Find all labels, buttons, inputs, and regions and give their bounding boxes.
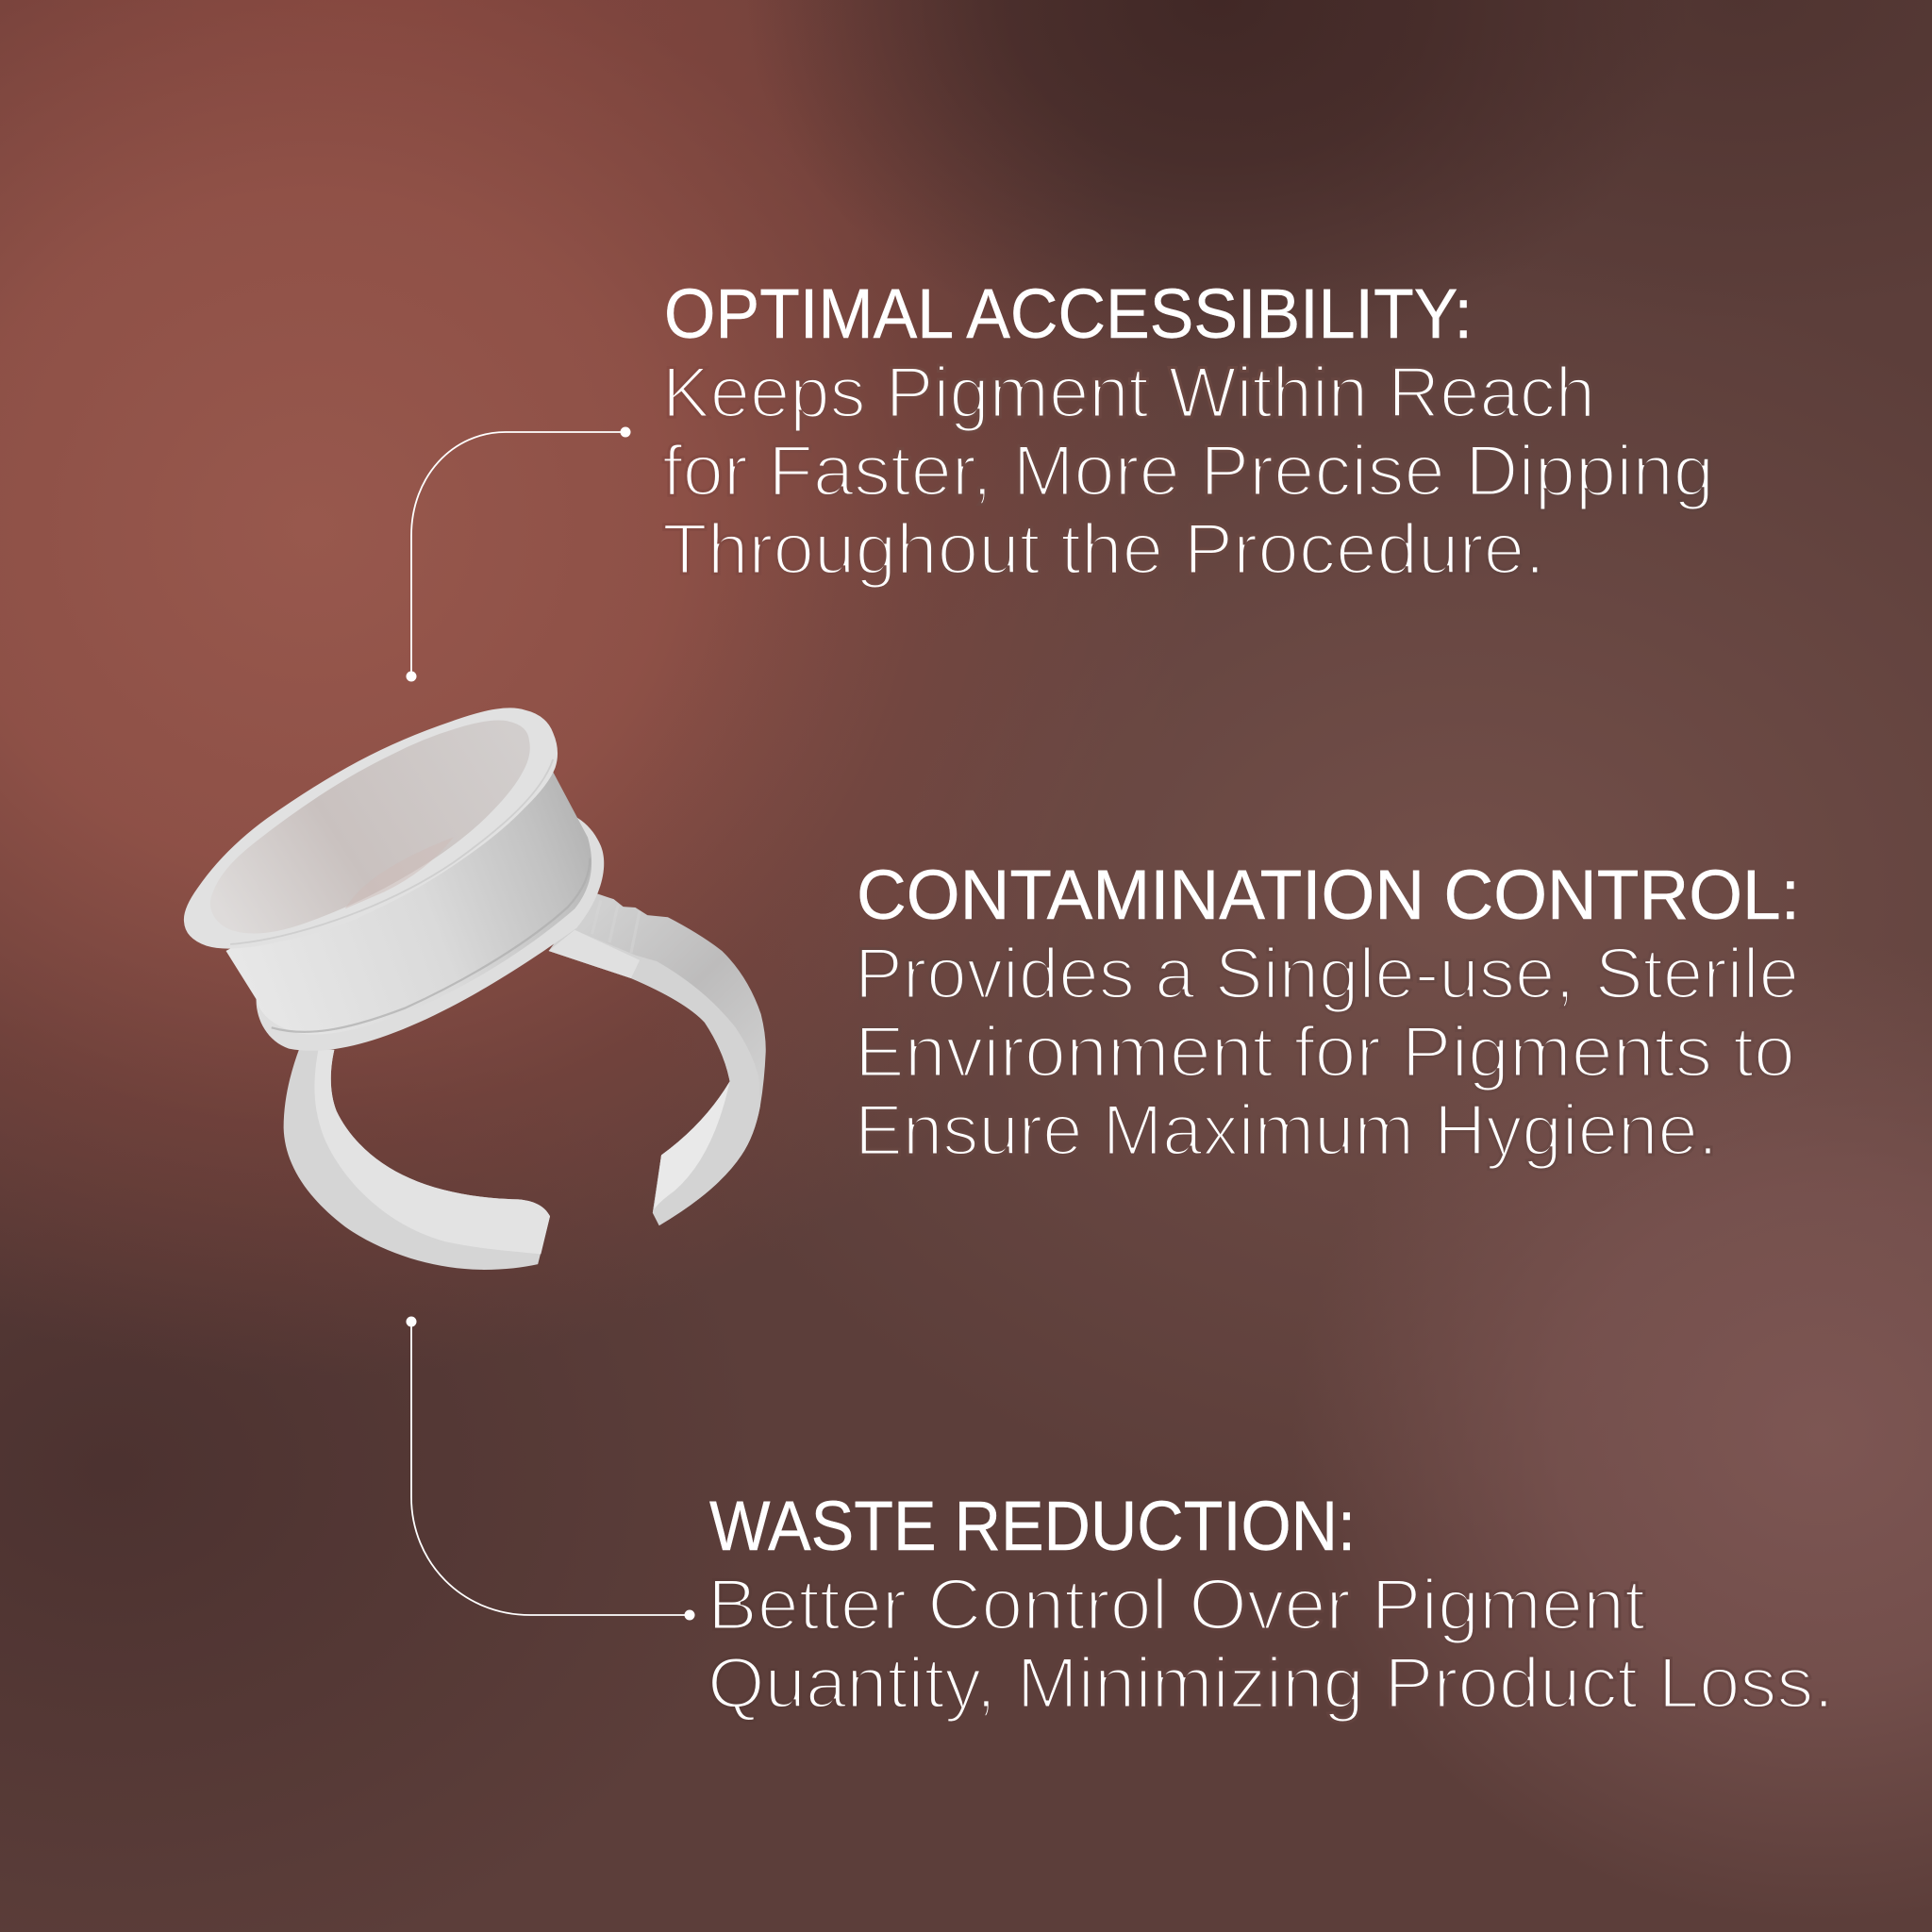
flange groove bbox=[272, 858, 590, 1032]
ring band right side bbox=[549, 892, 766, 1225]
rim edge highlight bbox=[230, 759, 553, 944]
pigment tint bbox=[345, 837, 454, 908]
connector: bottom callout line bbox=[406, 1317, 694, 1621]
connector: top callout line bbox=[406, 426, 630, 681]
cup base flange bbox=[257, 816, 604, 1051]
body text: Provides a Single-use, Sterile bbox=[855, 934, 1799, 1014]
text block: waste reduction bbox=[708, 1487, 1834, 1724]
text block: optimal accessibility bbox=[662, 275, 1714, 590]
cup interior bbox=[210, 721, 530, 933]
body text: Ensure Maximum Hygiene. bbox=[855, 1091, 1718, 1171]
heading: OPTIMAL ACCESSIBILITY: bbox=[664, 275, 1473, 353]
text block: contamination control bbox=[855, 856, 1800, 1171]
cup rim bbox=[184, 708, 558, 949]
heading: CONTAMINATION CONTROL: bbox=[857, 856, 1800, 934]
ring band left side bbox=[284, 1048, 550, 1270]
cup body bbox=[226, 772, 591, 1034]
body text: Environment for Pigments to bbox=[855, 1012, 1795, 1092]
body text: Throughout the Procedure. bbox=[662, 509, 1545, 590]
body text bbox=[708, 1565, 1834, 1724]
body text: Better Control Over Pigment bbox=[708, 1565, 1645, 1645]
heading: WASTE REDUCTION: bbox=[709, 1487, 1356, 1565]
illustration: white pigment ring cup bbox=[184, 708, 766, 1270]
body text: for Faster, More Precise Dipping bbox=[662, 431, 1714, 511]
body text bbox=[662, 353, 1714, 590]
body text: Keeps Pigment Within Reach bbox=[662, 353, 1595, 433]
body text bbox=[855, 934, 1799, 1171]
body text: Quantity, Minimizing Product Loss. bbox=[708, 1643, 1834, 1724]
